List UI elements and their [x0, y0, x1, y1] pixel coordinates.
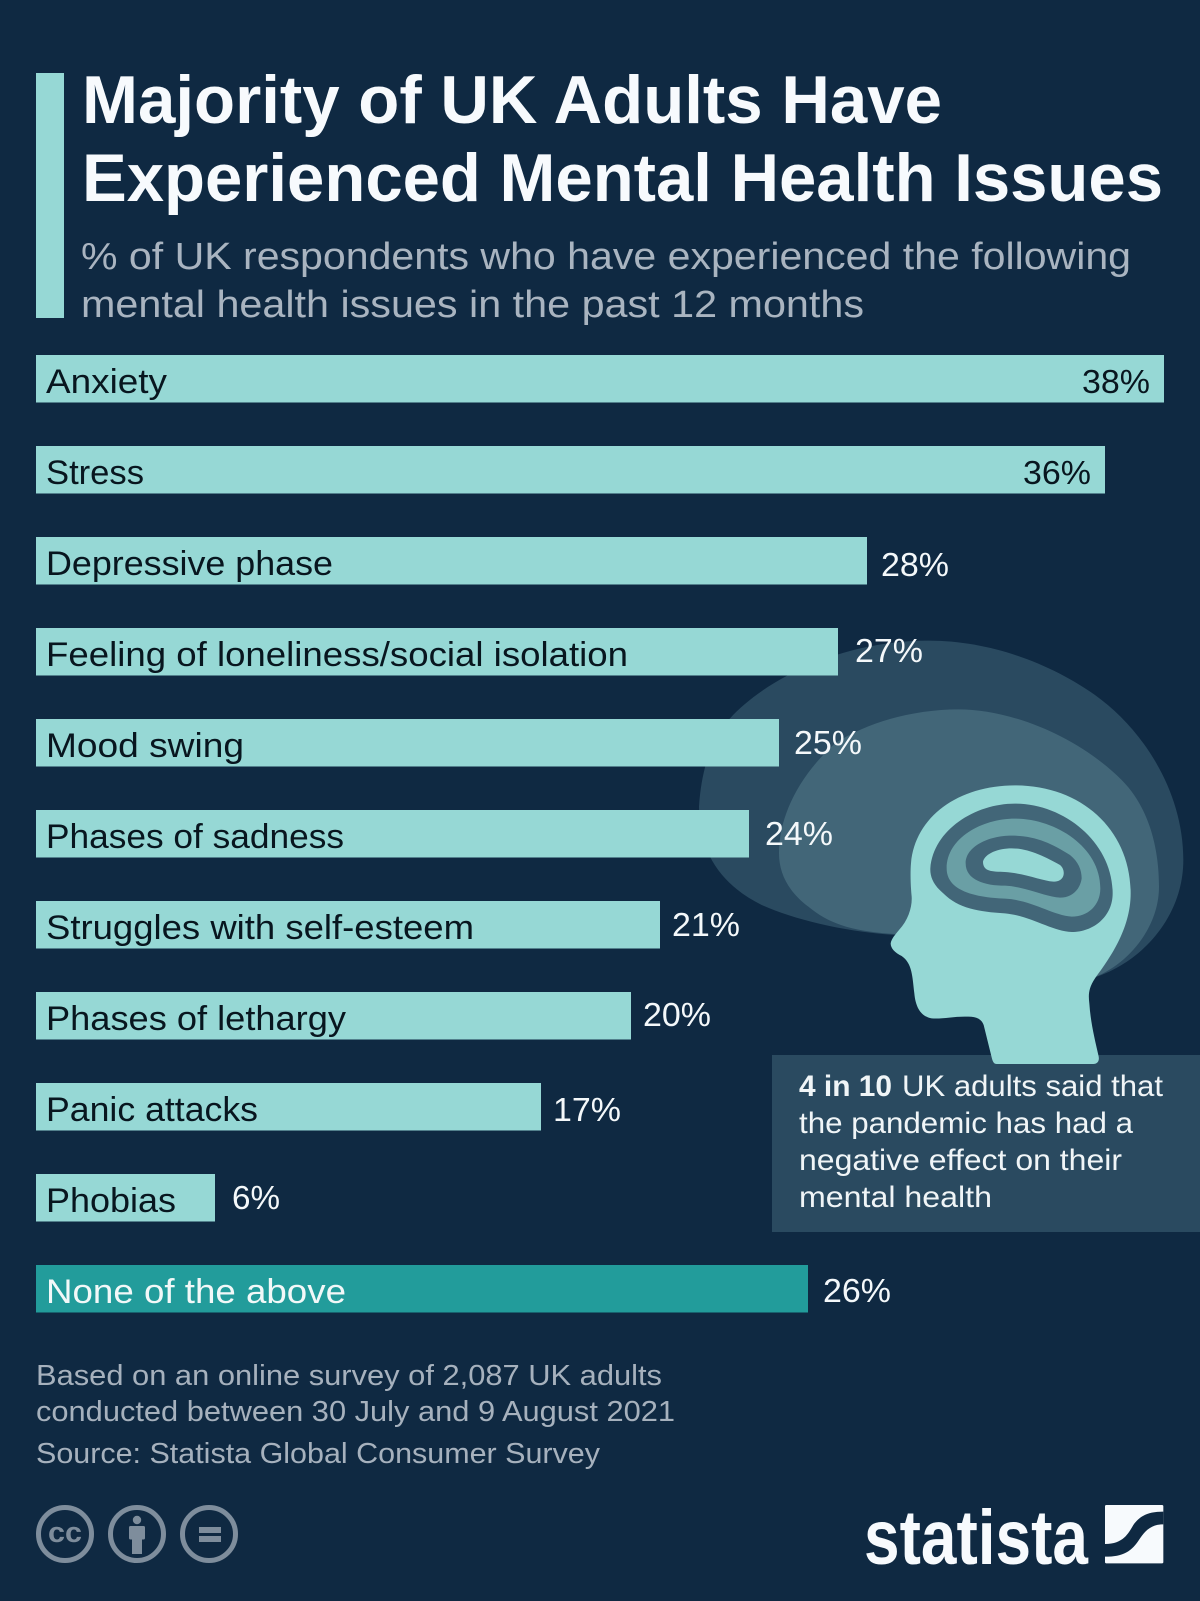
bar: Mood swing — [36, 719, 862, 766]
bar: Phobias — [36, 1174, 280, 1222]
bar: Mood swing: Mood swing — [46, 727, 244, 765]
icon: no derivatives — [182, 1508, 236, 1560]
survey note: Based on an online survey of 2,087 UK adults — [36, 1360, 662, 1392]
bar: Struggles with self-esteem: Struggles with self-esteem — [46, 909, 474, 947]
bar: Feeling of loneliness/social isolation: 27% — [855, 632, 923, 669]
bar: Panic attacks: 17% — [553, 1091, 621, 1128]
title — [82, 62, 1163, 216]
brain middle ring — [947, 819, 1100, 917]
bar: Phases of sadness — [36, 810, 833, 858]
bar: Stress: 36% — [1023, 454, 1091, 491]
bar: None of the above — [36, 1265, 891, 1312]
brain inner ring — [966, 836, 1082, 898]
callout box: 4 in 10 — [799, 1070, 892, 1103]
bar: Feeling of loneliness/social isolation — [36, 628, 923, 676]
subtitle: mental health issues in the past 12 months — [81, 284, 864, 326]
bar: Anxiety: 38% — [1082, 363, 1150, 400]
bar: Anxiety — [36, 355, 1164, 402]
bar: Phases of lethargy: 20% — [643, 996, 711, 1033]
bar: Struggles with self-esteem: 21% — [672, 906, 740, 943]
brain outer ring — [930, 804, 1113, 932]
bar: Anxiety: Anxiety — [46, 363, 167, 401]
survey note: conducted between 30 July and 9 August 2021 — [36, 1396, 675, 1428]
icon: creative commons — [38, 1508, 92, 1560]
icon: head silhouette with brain — [891, 785, 1131, 1064]
survey note — [36, 1360, 675, 1428]
illustration: radiating waves behind head — [699, 641, 1183, 978]
icon: creative commons: cc — [48, 1517, 82, 1549]
bar: Phases of sadness: 24% — [765, 815, 833, 852]
icon: attribution — [110, 1508, 164, 1560]
bar: Panic attacks: Panic attacks — [46, 1091, 258, 1129]
bar: Depressive phase: 28% — [881, 546, 949, 583]
bar: Phobias: Phobias — [46, 1182, 176, 1220]
bar: Stress — [36, 446, 1105, 494]
inner wave — [779, 709, 1159, 978]
bar: Phases of lethargy — [36, 992, 711, 1040]
callout box: mental health — [799, 1181, 992, 1214]
bar: None of the above: 26% — [823, 1272, 891, 1309]
bar: Depressive phase — [36, 537, 949, 584]
source: Source: Statista Global Consumer Survey — [36, 1438, 601, 1470]
callout box: UK adults said that — [902, 1070, 1164, 1103]
bar: Mood swing: 25% — [794, 724, 862, 761]
callout box: the pandemic has had a — [799, 1107, 1133, 1140]
subtitle — [81, 236, 1131, 326]
callout box — [772, 1055, 1200, 1232]
bar: Phases of lethargy: Phases of lethargy — [46, 1000, 346, 1038]
brain core — [983, 848, 1064, 882]
bar: Phases of sadness: Phases of sadness — [46, 818, 344, 856]
bar: Panic attacks — [36, 1083, 621, 1130]
title accent bar — [36, 73, 64, 318]
bar: Stress: Stress — [46, 454, 144, 492]
bar: Feeling of loneliness/social isolation: Feeling of loneliness/social isolation — [46, 636, 628, 674]
bar: Depressive phase: Depressive phase — [46, 545, 333, 583]
subtitle: % of UK respondents who have experienced the following — [81, 236, 1131, 278]
bar: Phobias: 6% — [232, 1179, 280, 1216]
title: Experienced Mental Health Issues — [82, 140, 1163, 216]
callout box: negative effect on their — [799, 1144, 1122, 1177]
statista logo mark — [1105, 1505, 1163, 1563]
bar: Struggles with self-esteem — [36, 901, 740, 948]
bar: None of the above: None of the above — [46, 1273, 346, 1311]
title: Majority of UK Adults Have — [82, 62, 942, 138]
head — [891, 785, 1131, 1064]
statista wordmark: statista — [864, 1495, 1089, 1581]
outer wave — [699, 641, 1183, 978]
